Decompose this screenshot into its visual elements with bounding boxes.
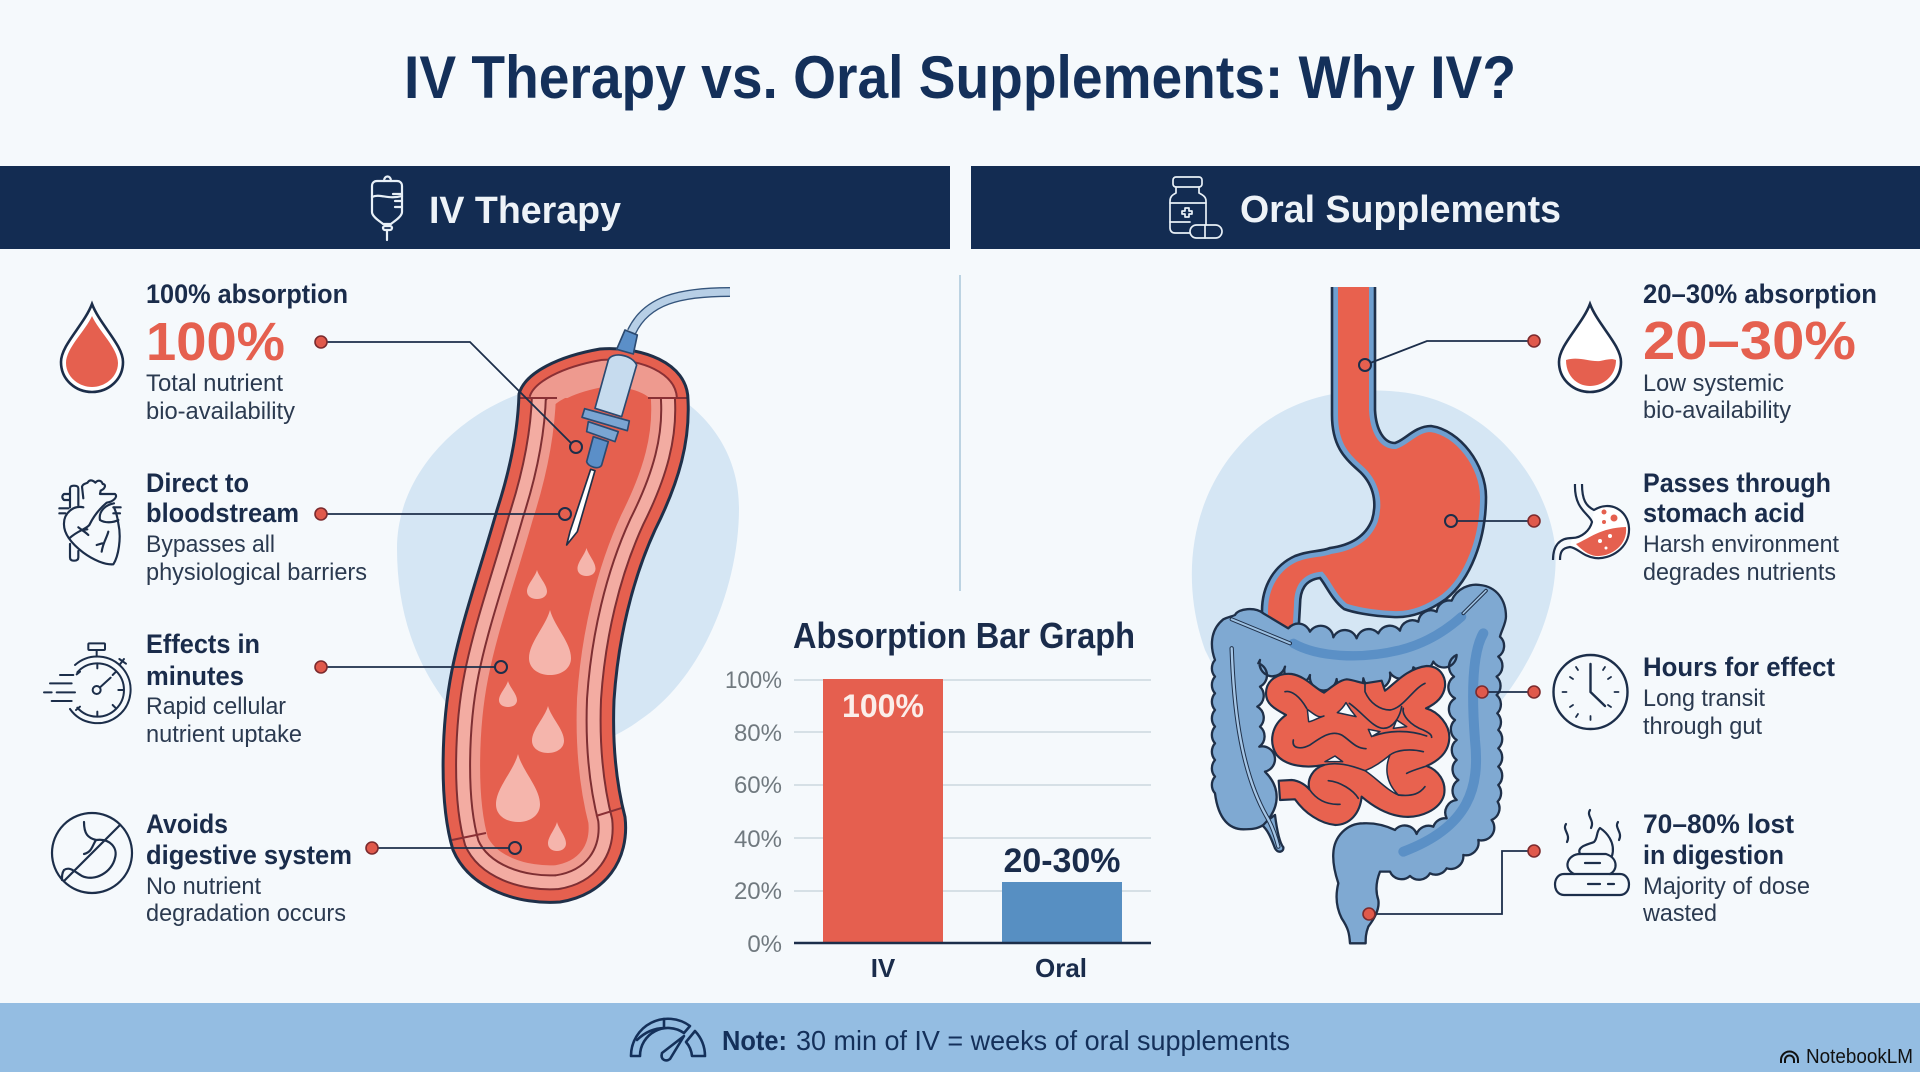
text: Effects in minutes: minutes <box>146 661 244 691</box>
note text: 30 min of IV = weeks of oral supplements <box>796 1025 1290 1056</box>
background blob <box>397 388 739 752</box>
text: Passes through stomach acid: stomach acid <box>1643 498 1805 528</box>
header: Oral Supplements <box>971 166 1920 249</box>
block: Hours for effect <box>1554 652 1835 740</box>
x axis labels <box>871 953 1087 983</box>
icon: pill bottle <box>1170 177 1222 238</box>
text: Avoids digestive system: degradation occurs <box>146 900 346 927</box>
text: Direct to bloodstream <box>146 468 367 586</box>
gaps between loops <box>1307 703 1407 795</box>
text: Effects in minutes <box>146 629 302 748</box>
chart title: Absorption Bar Graph <box>793 615 1135 656</box>
text: Avoids digestive system <box>146 809 352 927</box>
esophagus and stomach <box>1262 287 1486 640</box>
callout leader lines: oral side <box>1359 335 1540 920</box>
text: Passes through stomach acid <box>1643 468 1839 586</box>
text: 20-30% absorption: Low systemic <box>1643 370 1784 397</box>
icon: waste pile <box>1555 810 1629 895</box>
x axis labels: IV <box>871 953 896 983</box>
text: Hours for effect: Long transit <box>1643 685 1765 712</box>
heading: IV Therapy: IV Therapy <box>429 190 621 232</box>
text: Hours for effect <box>1643 652 1835 740</box>
text: Effects in minutes: Effects in <box>146 629 260 659</box>
text: Direct to bloodstream: Direct to <box>146 468 249 498</box>
footer note band <box>0 1003 1920 1072</box>
text: 70-80% lost in digestion: wasted <box>1642 900 1717 927</box>
bar: IV <box>823 679 943 943</box>
icon: stomach with acid <box>1553 484 1629 560</box>
text: 20-30% absorption: 20–30% absorption <box>1643 279 1877 309</box>
title: IV Therapy vs. Oral Supplements: Why IV? <box>404 44 1516 111</box>
text: Direct to bloodstream: Bypasses all <box>146 531 275 558</box>
icon: full blood drop <box>61 304 123 392</box>
block: 20-30% absorption <box>1559 279 1877 424</box>
text: 70-80% lost in digestion: Majority of dose <box>1643 873 1810 900</box>
text: Effects in minutes: nutrient uptake <box>146 721 302 748</box>
icon: IV bag <box>372 176 402 240</box>
appendix <box>1262 815 1283 852</box>
text: Avoids digestive system: digestive system <box>146 840 352 870</box>
NotebookLM watermark: NotebookLM <box>1806 1046 1913 1068</box>
text: 70-80% lost in digestion <box>1642 809 1810 927</box>
y axis labels: 20% <box>734 878 782 905</box>
icon: clock <box>1554 655 1628 729</box>
text: Effects in minutes: Rapid cellular <box>146 693 286 720</box>
text: Direct to bloodstream: bloodstream <box>146 498 299 528</box>
blood droplets <box>496 548 596 851</box>
y axis labels: 60% <box>734 772 782 799</box>
panel: IV therapy vein illustration <box>397 292 739 902</box>
text: Hours for effect: through gut <box>1643 713 1762 740</box>
text: 100% absorption <box>146 279 348 425</box>
text: Avoids digestive system: No nutrient <box>146 873 261 900</box>
background blob <box>1192 390 1556 705</box>
text: Hours for effect: Hours for effect <box>1643 652 1835 682</box>
bar: Oral <box>1002 842 1122 943</box>
text: Direct to bloodstream: physiological barriers <box>146 559 367 586</box>
heading: Oral Supplements: Oral Supplements <box>1240 189 1561 231</box>
text: 100% absorption: 100% absorption <box>146 279 348 309</box>
text: 20-30% absorption: bio-availability <box>1643 397 1791 424</box>
icon: no stomach <box>52 813 132 893</box>
y axis labels: 0% <box>747 931 782 958</box>
block: Passes through stomach acid <box>1553 468 1839 586</box>
text: Passes through stomach acid: Passes through <box>1643 468 1831 498</box>
icon: gauge <box>631 1019 705 1060</box>
text: Passes through stomach acid: Harsh environment <box>1643 531 1839 558</box>
x axis <box>794 942 1151 944</box>
icon: heart <box>59 480 121 564</box>
note text: Note: <box>722 1025 787 1056</box>
text: 100% absorption: bio-availability <box>146 398 295 425</box>
icon: stopwatch <box>44 643 131 723</box>
fold lines <box>1285 683 1432 804</box>
center divider line <box>959 275 961 591</box>
block: Direct to bloodstream <box>59 468 367 586</box>
colon darker bands <box>1232 591 1486 852</box>
icon: partly filled drop <box>1559 304 1621 392</box>
text: Avoids digestive system: Avoids <box>146 809 228 839</box>
y axis labels: 100% <box>725 667 782 694</box>
y axis labels <box>725 667 782 958</box>
text: 20-30% absorption: 20–30% <box>1643 311 1856 371</box>
IV catheter and needle <box>567 292 730 545</box>
bar: IV: 100% <box>842 688 924 724</box>
vein <box>443 349 690 902</box>
small intestine <box>1266 666 1449 825</box>
block: Effects in minutes <box>44 629 302 748</box>
header: IV Therapy <box>0 166 950 249</box>
y axis labels: 40% <box>734 826 782 853</box>
bar: Oral: 20-30% <box>1004 842 1120 880</box>
colon body <box>1212 585 1506 943</box>
text: 100% absorption: 100% <box>146 312 285 372</box>
text: 100% absorption: Total nutrient <box>146 370 283 397</box>
callout leader lines: IV side <box>315 336 582 854</box>
text: Passes through stomach acid: degrades nutrients <box>1643 559 1836 586</box>
text: 70-80% lost in digestion: 70–80% lost <box>1643 809 1794 839</box>
block: Avoids digestive system <box>52 809 352 927</box>
text: 70-80% lost in digestion: in digestion <box>1643 840 1784 870</box>
bar chart: absorption <box>725 615 1151 983</box>
colon <box>1212 585 1506 943</box>
panel: digestive system illustration <box>1192 287 1556 943</box>
y axis labels: 80% <box>734 720 782 747</box>
block: 100% absorption <box>61 279 348 425</box>
block: 70-80% lost in digestion <box>1555 809 1810 927</box>
grid lines <box>794 680 1151 891</box>
text: 20-30% absorption <box>1643 279 1877 424</box>
x axis labels: Oral <box>1035 953 1087 983</box>
